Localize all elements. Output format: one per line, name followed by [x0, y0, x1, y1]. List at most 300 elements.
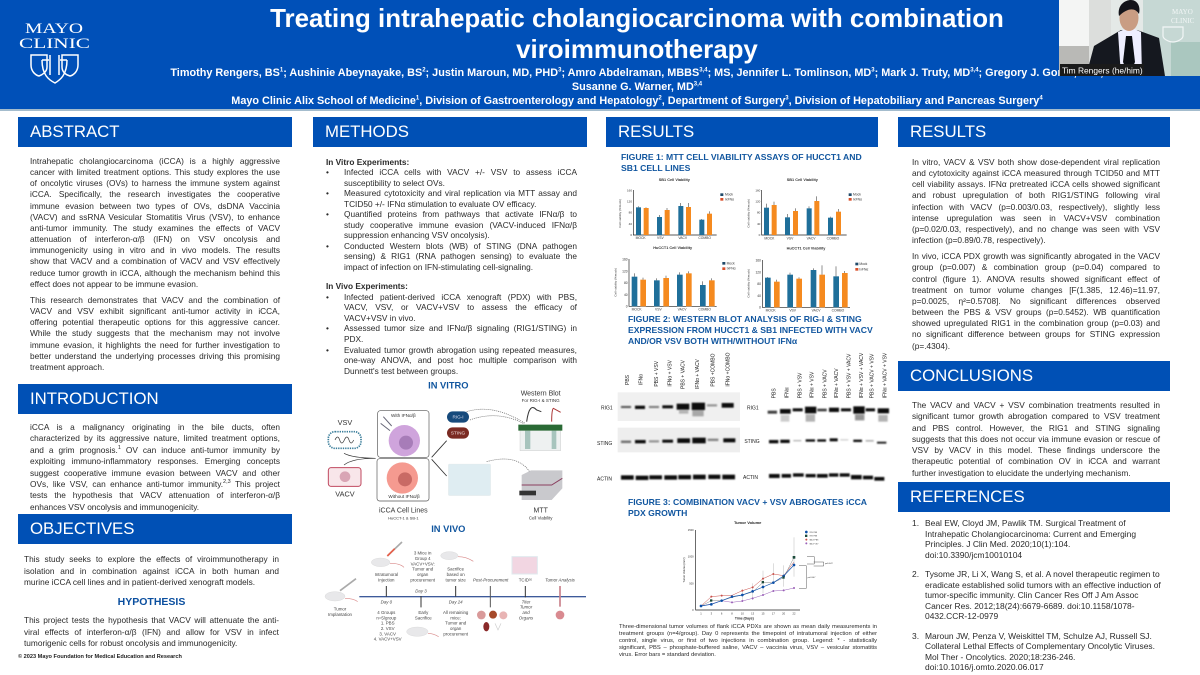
chart: SB1 left: Cell viability (%mock) — [618, 199, 622, 228]
figure 2: western blots: STING — [597, 441, 612, 447]
chart: HuCCT1 left: 160 — [622, 257, 628, 261]
abstract text: (VACV) and ssRNA Vesicular Stomatitis Virus (VSV), to enhance — [30, 212, 280, 222]
references list: Tysome JR, Li X, Wang S, et al. A novel therapeutic regimen to — [925, 569, 1160, 579]
panel: results continued heading: RESULTS — [910, 122, 986, 141]
figure 2: western blots: IFNα + VSV — [810, 371, 816, 398]
panel: abstract heading — [18, 117, 292, 147]
copyright footer: © 2023 Mayo Foundation for Medical Education and Research — [18, 654, 182, 660]
chart: HuCCT1 right: VACV — [812, 309, 821, 313]
diagram: in vitro: Without IFNα/β — [388, 494, 420, 499]
diagram: in vivo: 3 Mice in — [414, 551, 432, 556]
chart: HuCCT1 left — [613, 257, 736, 312]
references list: eradicate established solid tumors with an effective induction of — [925, 580, 1161, 590]
logo: Mayo Clinic — [19, 21, 90, 84]
chart: SB1 right: 80 — [757, 211, 761, 215]
results text: infection (p=0.89/0.78, respectively). — [912, 235, 1046, 245]
methods in vivo text: Assessed tumor size and IFNα/β signaling (RIG1/STING) in — [344, 323, 577, 333]
methods in vitro text: impact of infection on IFN-stimulating cell-signaling. — [344, 262, 533, 272]
introduction text: suggest cooperative immune evasion between VACV and other — [30, 468, 280, 478]
results text: between the PBS & VSV groups (p=0.5452). WB quantification — [912, 307, 1160, 317]
chart: HuCCT1 left: COMBO — [698, 308, 711, 312]
abstract text: immunogenicity using in vitro and in vivo models. The results — [30, 245, 280, 255]
results text: no significant difference between groups for STING expression — [912, 329, 1160, 339]
panel: results heading — [606, 117, 878, 147]
figure 2: western blots: PBS + VSV — [654, 360, 660, 387]
diagram: in vivo: Group 4 — [415, 556, 431, 561]
diagram: in vitro: MTT — [533, 508, 549, 515]
figure 3: tumor volume line chart: 1500 — [688, 528, 694, 532]
abstract text: While the study suggests that the mechanism may not involve — [30, 328, 280, 338]
conclusions text: therapeutic potential of combination OV in iCCA and warrant — [912, 456, 1160, 466]
methods in vitro text: Quantified proteins from pathways that activate IFNα/β to — [344, 209, 577, 219]
diagram: in vivo: Day 24 — [449, 599, 463, 604]
diagram: in vitro: RIG-I — [452, 415, 464, 420]
chart: HuCCT1 right: COMBO — [832, 309, 845, 313]
figure 2: western blots: IFNα +COMBO — [726, 352, 732, 387]
introduction text: enhances VSV oncolysis and immunogenicity. — [30, 502, 199, 512]
objectives text — [24, 554, 279, 587]
results text: (p=0.02/0.03, respectively), and no change was seen with VSV — [912, 224, 1160, 234]
chart: HuCCT1 left: IxFNα — [727, 267, 736, 271]
title: viroimmunotherapy — [516, 36, 758, 64]
figure 3 caption: virus. Error bars = standard deviation. — [619, 652, 716, 658]
figure 3: tumor volume line chart: 17 — [772, 611, 775, 615]
introduction text: and a grim prognosis.1 OV can induce anti-tumor immunity by — [30, 445, 280, 455]
hypothesis heading: HYPOTHESIS — [118, 596, 185, 608]
figure 3: tumor volume line chart — [682, 520, 833, 621]
figure 3: tumor volume line chart: Tumor Volume (mm³) — [682, 557, 686, 582]
methods in vivo text — [326, 281, 577, 376]
methods in vitro text: • — [326, 167, 329, 177]
chart: HuCCT1 left: MOCK — [632, 308, 642, 312]
figure 3: tumor volume line chart: 15 — [762, 611, 765, 615]
diagram: in vivo: Sacrifice — [415, 616, 432, 621]
methods in vitro text: Conducted Western blots (WB) of STING (DNA pathogen — [344, 240, 577, 250]
methods in vivo text: In Vivo Experiments: — [326, 281, 408, 291]
figure 3: tumor volume line chart: 1 — [700, 611, 702, 615]
results text: In vivo, iCCA PDX growth was significantly abrogated in the VACV — [912, 251, 1160, 261]
figure 2: western blots: RIG1 — [747, 406, 759, 412]
figure 3: tumor volume line chart: 8 — [731, 611, 733, 615]
diagram: in vivo: Titer — [522, 599, 531, 604]
methods in vitro text: • — [326, 209, 329, 219]
figure 3 heading: PDX GROWTH — [628, 508, 687, 518]
figure 2: western blots: PBS + VACV — [681, 359, 687, 389]
introduction text: characterized by its aggressive nature, limited treatment options, — [30, 433, 280, 443]
methods in vitro text — [326, 156, 577, 272]
figure 3 caption: treatment groups (n=4/group). Day 0 represents the timepoint of intratumoral injection of either — [619, 631, 877, 637]
figure 3 heading — [628, 496, 867, 518]
affiliations: Mayo Clinic Alix School of Medicine1, Division of Gastroenterology and Hepatology2, Department of Surgery3, Division of Hepatobiliary and Pancreas Surgery4 — [231, 95, 1043, 107]
chart: SB1 left: VACV — [678, 236, 688, 240]
conclusions text — [912, 400, 1160, 478]
figure 3: tumor volume line chart: VACV PBS — [809, 539, 819, 542]
panel: introduction heading — [18, 384, 292, 414]
diagram: in vivo: mice: — [450, 615, 461, 620]
figure 2: western blots: RIG1 — [601, 406, 613, 412]
chart: SB1 left: COMBO — [698, 236, 711, 240]
methods in vitro text: Measured cytotoxicity and viral replication via MTT assay and — [344, 188, 577, 198]
chart: HuCCT1 left: VSV — [655, 308, 662, 312]
diagram: in vivo: Organs — [519, 615, 534, 620]
figure 2: western blots — [597, 352, 890, 482]
panel: introduction heading: INTRODUCTION — [30, 389, 159, 408]
figure 3: tumor volume line chart: 22 — [793, 611, 796, 615]
diagram: in vivo: 50 — [529, 577, 532, 581]
figure 2: western blots: ACTIN — [597, 476, 612, 482]
chart: SB1 right: 120 — [755, 200, 761, 204]
references list: Intrahepatic Cholangiocarcinoma: Current and Emerging — [925, 528, 1136, 538]
references list: Beal EW, Cloyd JM, Pawlik TM. Surgical Treatment of — [925, 518, 1126, 528]
abstract text: Intrahepatic cholangiocarcinoma (iCCA) is a highly aggressive — [30, 156, 280, 166]
chart: HuCCT1 left: Cell viability (%mock) — [613, 268, 617, 297]
diagram: in vivo: procurement — [443, 632, 469, 637]
conclusions text: significant tumor growth abrogation compared to VSV treatment — [912, 411, 1160, 421]
references list: Maroun JW, Penza V, Weiskittel TM, Schulze AJ, Russell SJ. — [925, 630, 1152, 640]
figure 3: tumor volume line chart: 3 — [711, 611, 713, 615]
methods in vivo text: • — [326, 345, 329, 355]
panel: objectives heading — [18, 514, 292, 544]
speaker video thumbnail: Tim Rengers (he/him) — [1062, 66, 1143, 76]
figure 2: western blots: IFNα + VACV + VSV — [882, 352, 888, 398]
results text: In vitro, VACV & VSV both show dose-dependent viral replication — [912, 157, 1160, 167]
methods in vitro text: susceptibility to select OVs. — [344, 178, 445, 188]
chart: SB1 right: VACV — [807, 237, 816, 241]
diagram: in vivo: 4. VACV+VSV — [374, 637, 402, 642]
figure 3: tumor volume line chart: 0 — [692, 608, 694, 612]
diagram: in vivo: Tumor — [520, 605, 533, 610]
diagram: in vivo: Tumor and — [412, 567, 434, 572]
diagram: in vivo — [324, 524, 586, 642]
chart: SB1 right: 40 — [757, 222, 761, 226]
diagram: in vivo: organ — [450, 626, 462, 631]
results text: intense upregulation was seen in VACV+VSV combination — [912, 213, 1160, 223]
abstract text: attenuation of interferon-α/β (IFN) on VSV oncolysis and — [30, 234, 280, 244]
chart: SB1 right: 0 — [759, 233, 761, 237]
chart: SB1 right: Cell viability (%mock) — [746, 199, 750, 228]
diagram: in vitro: VSV — [338, 418, 352, 427]
figure 1: bar charts: SB1 Cell Viability — [659, 178, 691, 182]
title — [270, 5, 1004, 64]
abstract text: offering potential therapeutic options for this aggressive cancer. — [30, 317, 280, 327]
chart: HuCCT1 right: 40 — [757, 294, 761, 298]
introduction text: exploiting immuno-inflammatory responses. Emerging concepts — [30, 456, 280, 466]
chart: SB1 left: 160 — [627, 189, 632, 193]
chart: SB1 right — [746, 189, 862, 241]
hypothesis text: tumorigenic cells for robust oncolysis and immunogenicity. — [24, 638, 237, 648]
chart: SB1 right: 160 — [755, 189, 761, 193]
abstract text: iCCA. Specifically, the research investigates the cooperative — [30, 189, 280, 199]
figure 2: western blots: PBS + VACV + VSV — [870, 353, 876, 398]
methods in vivo text: Infected patient-derived iCCA xenograft (PDX) with PBS, — [344, 292, 577, 302]
panel: objectives heading: OBJECTIVES — [30, 519, 134, 538]
figure 2: western blots: IFNα + VACV — [695, 358, 701, 389]
introduction text — [30, 422, 280, 512]
figure 2 heading — [628, 314, 873, 346]
diagram: in vivo: Early — [418, 610, 429, 615]
diagram: in vivo: Tumor Analysis — [545, 577, 576, 582]
diagram: in vivo: All remaining — [443, 610, 469, 615]
diagram: in vivo: 4 Groups — [377, 610, 396, 615]
figure 2 heading: FIGURE 2: WESTERN BLOT ANALYSIS OF RIG-I & STING — [628, 314, 862, 324]
figure 3: tumor volume line chart: 20 — [782, 611, 786, 615]
figure 3 caption: control, single virus, or first of two injections in combination group. Legend: * - statistically — [619, 638, 877, 644]
results text: showed upregulated RIG1 in the combination group (p=0.03) and — [912, 318, 1160, 328]
diagram: in vitro: STING — [451, 431, 465, 436]
chart: HuCCT1 right — [747, 258, 868, 313]
conclusions text: VSV by VACV in this model. These findings underscore the — [912, 445, 1160, 455]
methods in vivo text: Evaluated tumor growth abrogation using repeated measures, — [344, 345, 577, 355]
results text: treatment on tumor volume changes [F(1.385, 12.46)=11.97, — [912, 285, 1160, 295]
chart: SB1 right: Mock — [853, 193, 861, 197]
chart: SB1 right: MOCK — [764, 237, 775, 241]
hypothesis text: viral effects of interferon-α/β (IFN) and allow for VSV in infect — [24, 626, 279, 636]
chart: HuCCT1 right: MOCK — [766, 309, 776, 313]
chart: SB1 left: 80 — [629, 211, 632, 215]
authors: Timothy Rengers, BS1; Aushinie Abeynayake, BS2; Justin Maroun, MD, PHD3; Amro Abdelraman, MBBS3,4; MS, Jennifer L. Tomlinson, MD3; Mark J. Truty, MD3,4; Gregory J. Gores, MD2; — [170, 67, 1104, 79]
abstract text: effect does not appear to be immune evasion. — [30, 279, 198, 289]
references list: 0432.CCR-12-0979 — [925, 611, 998, 621]
figure 2: western blots: IFNα — [785, 387, 791, 398]
logo: Mayo Clinic: MAYO — [25, 21, 83, 37]
abstract text — [30, 156, 280, 372]
chart: HuCCT1 left: VACV — [678, 308, 687, 312]
logo: Mayo Clinic: CLINIC — [19, 36, 90, 52]
figure 2: western blots: STING — [744, 439, 760, 445]
chart: SB1 left: VSV — [657, 236, 664, 240]
introduction text: OVs, like VSV, can enhance anti-tumor immunity.2,3 This project — [30, 479, 280, 489]
figure 3: tumor volume line chart: p=0.0047 — [825, 563, 833, 565]
figure 3: tumor volume line chart: Tumor Volume — [734, 520, 762, 525]
references list — [912, 518, 1161, 672]
in vivo heading: IN VIVO — [431, 524, 465, 534]
results text: group (p=0.007) & combination group (p=0.04) compared to — [912, 262, 1160, 272]
methods in vitro text: • — [326, 240, 329, 250]
methods in vitro text: Infected iCCA cells with VACV +/- VSV to assess iCCA — [344, 167, 577, 177]
figure 3 caption: significant, PBS – phosphate-buffered saline, VACV – vaccinia virus, VSV – vesicular stomatitis — [619, 645, 877, 651]
panel: conclusions heading — [898, 361, 1170, 391]
diagram: in vivo: Day 0 — [381, 599, 393, 604]
results text: and cytotoxicity against iCCA measured through TCID50 and MTT — [912, 168, 1160, 178]
hypothesis text — [24, 615, 279, 648]
diagram: in vivo: Injection — [378, 578, 395, 583]
diagram: in vivo: Post-Procurement — [473, 577, 509, 582]
figure 1: bar charts: HuCCT1 Cell Viability — [787, 247, 826, 251]
results text — [912, 157, 1160, 350]
objectives text: murine iCCA cell lines and in patient-derived xenograft models. — [24, 577, 255, 587]
figure 1 heading: SB1 CELL LINES — [621, 163, 690, 173]
panel: conclusions heading: CONCLUSIONS — [910, 366, 1033, 385]
methods in vitro text: suppression enhancing VSV oncolysis). — [344, 230, 490, 240]
diagram: in vivo: n=5/group — [376, 615, 397, 620]
references list: Principles. J Clin Med. 2020;10(1):104. — [925, 539, 1070, 549]
methods in vivo text: • — [326, 292, 329, 302]
diagram: in vivo: Tumor — [334, 606, 347, 611]
references list: doi:10.3390/jcm10010104 — [925, 550, 1022, 560]
chart: HuCCT1 right: 120 — [755, 270, 761, 274]
diagram: in vivo: procurement — [410, 577, 436, 582]
abstract text: immune evasion, it highlights the need for further investigation to — [30, 340, 280, 350]
results text: and robust upregulation of both RIG1/STING following viral — [912, 190, 1160, 200]
diagram: in vivo: Tumor and — [445, 621, 467, 626]
diagram: in vivo: 2. VSV — [381, 626, 395, 631]
diagram: in vivo: Day 3 — [415, 588, 427, 593]
speaker video thumbnail — [1059, 0, 1200, 76]
methods in vivo text: PDX. — [344, 334, 363, 344]
diagram: in vitro: With IFNα/β — [391, 413, 416, 418]
results text: cell viability assays. IFNα pretreated iCCA cells showed significant — [912, 179, 1160, 189]
diagram: in vivo: tumor size — [446, 578, 466, 583]
figure 3 caption — [619, 624, 877, 658]
figure 3: tumor volume line chart: 500 — [689, 582, 694, 586]
figure 1: bar charts: SB1 Cell Viability — [787, 178, 819, 182]
diagram: in vitro — [328, 380, 562, 520]
references list: tumor-specific immunity. Clin Cancer Res Off J Am Assoc — [925, 590, 1138, 600]
diagram: in vivo: and — [522, 610, 530, 615]
diagram: in vitro: VACV — [335, 490, 355, 499]
chart: SB1 right: COMBO — [827, 237, 840, 241]
authors — [170, 67, 1104, 93]
figure 3: tumor volume line chart: VSV PBS — [809, 532, 818, 534]
figure 3: tumor volume line chart: 1000 — [688, 555, 694, 559]
methods in vitro text: sensing) & RIG1 (RNA pathogen sensing) to evaluate the — [344, 251, 577, 261]
figure 3: tumor volume line chart: p=0.0047 — [808, 577, 815, 579]
diagram: in vivo: 3. VACV — [379, 631, 396, 636]
diagram: in vivo: organ — [417, 572, 429, 577]
figure 3: tumor volume line chart: Time (Days) — [735, 617, 754, 621]
results text: control (figure 1). ANOVA results showed significant effect of — [912, 274, 1160, 284]
diagram: in vitro: HuCCT-1 & SB-1 — [388, 515, 419, 520]
chart: HuCCT1 right: 160 — [755, 258, 761, 262]
methods in vitro text: • — [326, 188, 329, 198]
chart: HuCCT1 left: 120 — [622, 269, 628, 273]
hypothesis text: This project tests the hypothesis that VACV will attenuate the anti- — [24, 615, 279, 625]
figure 1 heading — [621, 152, 862, 173]
title: Treating intrahepatic cholangiocarcinoma with combination — [270, 5, 1004, 33]
authors: Susanne G. Warner, MD3,4 — [572, 81, 702, 93]
chart: SB1 right: IxFNα — [853, 197, 862, 201]
panel: methods heading: METHODS — [325, 122, 409, 141]
diagram: in vivo: Sacrifice — [447, 567, 465, 572]
figure 2: western blots: ACTIN — [743, 475, 758, 481]
diagram: in vivo: Implantation — [328, 612, 353, 617]
methods in vivo text: VACV+VSV in vivo. — [344, 313, 416, 323]
chart: SB1 left: 40 — [629, 222, 632, 226]
figure 2: western blots: IFNα + VSV + VACV — [859, 352, 865, 398]
chart: HuCCT1 right: Cell viability (%mock) — [747, 269, 751, 298]
figure 2: western blots: PBS + VSV — [797, 372, 803, 398]
objectives text: This study seeks to explore the effects of viroimmunotherapy in — [24, 554, 279, 564]
chart: HuCCT1 right: IxFNα — [859, 267, 868, 271]
panel: results continued heading — [898, 117, 1170, 147]
chart: SB1 left — [618, 189, 734, 240]
abstract text: better understand the underlying processes driving this promising — [30, 351, 280, 361]
references list: 3. — [912, 630, 919, 640]
conclusions text: and PBS control. However, the RIG1 and STING signaling — [912, 423, 1160, 433]
figure 3: tumor volume line chart: 6 — [721, 611, 723, 615]
diagram: in vitro: iCCA Cell Lines — [379, 507, 428, 514]
references list: Mol Ther - Oncolytics. 2020;18:236-246. — [925, 652, 1075, 662]
references list: 2. — [912, 569, 919, 579]
abstract text: show that VACV and a combination of VACV and VSV effectively — [30, 256, 280, 266]
panel: references heading: REFERENCES — [910, 486, 1025, 506]
references list: Collateral Lethal Effects of Complementary Oncolytic Viruses. — [925, 641, 1155, 651]
figure 3: tumor volume line chart: VACV VSV — [809, 542, 819, 545]
figure 2: western blots: PBS +COMBO — [711, 353, 717, 387]
methods in vivo text: • — [326, 323, 329, 333]
methods in vitro text: In Vitro Experiments: — [326, 156, 409, 166]
figure 2: western blots: PBS — [772, 388, 778, 398]
chart: HuCCT1 left: Mock — [727, 261, 735, 265]
chart: HuCCT1 right: VSV — [789, 309, 797, 313]
chart: HuCCT1 left: 80 — [624, 281, 628, 285]
conclusions text: The VACV and VACV + VSV combination treatments resulted in — [912, 400, 1160, 410]
chart: SB1 right: VSV — [787, 237, 794, 241]
abstract text: cancer with limited treatment options. This study explores the use — [30, 167, 280, 177]
chart: HuCCT1 left: 40 — [624, 293, 628, 297]
figure 3: tumor volume line chart: 13 — [751, 611, 755, 615]
chart: SB1 left: Mock — [725, 193, 733, 197]
figure 2 heading: EXPRESSION FROM HUCCT1 & SB1 INFECTED WITH VACV — [628, 324, 873, 334]
abstract text: VACV and VSV exhibit significant anti-tumor activity in iCCA, — [30, 306, 280, 316]
figure 2: western blots: IFNα + VACV — [834, 368, 840, 398]
abstract text: anti-tumor immunity. The study examines the effects of VACV — [30, 223, 280, 233]
chart: SB1 left: MOCK — [636, 236, 646, 240]
panel: abstract heading: ABSTRACT — [30, 122, 120, 141]
methods in vivo text: one-way ANOVA, and post hoc multiple comparison with — [344, 355, 577, 365]
figure 1 heading: FIGURE 1: MTT CELL VIABILITY ASSAYS OF HUCCT1 AND — [621, 152, 862, 162]
speaker video thumbnail: CLINIC — [1171, 17, 1195, 25]
introduction text: iCCA is a malignancy originating in the bile ducts, often — [30, 422, 280, 432]
diagram: in vivo: VACV+VSV: — [411, 561, 435, 566]
panel: references heading — [898, 482, 1170, 512]
figure 1: bar charts: HuCCT1 Cell Viability — [653, 246, 693, 250]
figure 2 heading: AND/OR VSV BOTH WITH/WITHOUT IFNα — [628, 336, 797, 346]
abstract text: treatment approach. — [30, 362, 104, 372]
results text: p=0.0025, η²=0.5708]. No significant differences observed — [912, 296, 1160, 306]
figure 3: tumor volume line chart: VSV PBS — [809, 536, 818, 538]
figure 3 caption: Three-dimensional tumor volumes of flank iCCA PDXs are shown as mean daily measurements in — [619, 624, 877, 630]
methods in vivo text: VACV, VSV, or VACV+VSV to assess the efficacy of — [344, 302, 577, 312]
abstract text: of oncolytic viruses (OVs) to harness the immune system against — [30, 178, 280, 188]
figure 2: western blots: PBS + VSV + VACV — [846, 353, 852, 398]
chart: HuCCT1 right: 0 — [759, 306, 761, 310]
diagram: in vitro: For RIG-I & STING — [522, 398, 560, 403]
methods in vitro text: TCID50 +/- IFNα stimulation to evaluate OV efficacy. — [344, 198, 536, 208]
speaker video thumbnail: MAYO — [1172, 8, 1193, 16]
results text: infection with VACV (p=0.003/0.03, respectively), slightly less — [912, 202, 1160, 212]
header banner — [0, 0, 1200, 111]
in vitro heading: IN VITRO — [428, 380, 469, 390]
chart: SB1 left: IxFNα — [725, 197, 734, 201]
abstract text: reduce tumor growth in iCCA, although the mechanism behind this — [30, 268, 280, 278]
methods in vivo text: Dunnett's test between groups. — [344, 366, 458, 376]
diagram: in vitro: Western Blot — [521, 390, 561, 397]
figure 3: tumor volume line chart: 10 — [741, 611, 744, 615]
chart: HuCCT1 left: 0 — [626, 305, 628, 309]
diagram: in vivo: Intratumoral — [375, 572, 398, 577]
figure 2: western blots: IFNα + VSV — [668, 359, 674, 387]
abstract text: This research demonstrates that VACV and the combination of — [30, 295, 280, 305]
chart: SB1 left: 0 — [630, 233, 632, 237]
chart: HuCCT1 right: 80 — [757, 282, 761, 286]
figure 2: western blots: IFNα — [638, 374, 644, 385]
methods in vitro text: study cooperative immune evasion (VACV-induced IFNα/β — [344, 220, 577, 230]
figure 1: bar charts — [613, 178, 868, 313]
objectives text: isolation and in combination against iCCA in both human and — [24, 566, 279, 576]
introduction text: tests the hypothesis that VACV attenuation of interferon-α/β — [30, 490, 280, 500]
chart: HuCCT1 right: Mock — [859, 262, 868, 266]
